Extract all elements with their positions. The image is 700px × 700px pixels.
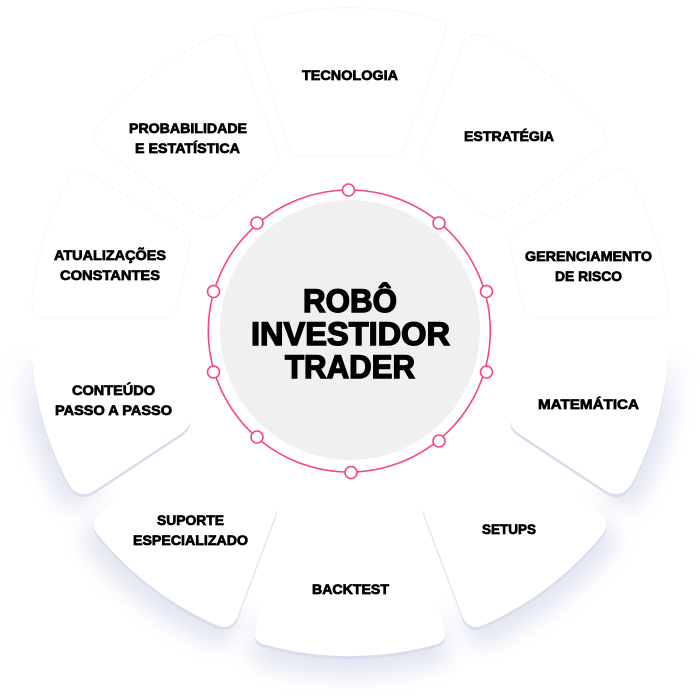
label: Atualizações constantes: CONSTANTES — [60, 268, 160, 284]
label: Suporte especializado: ESPECIALIZADO — [133, 533, 248, 549]
center title: INVESTIDOR — [251, 316, 450, 352]
label: Conteúdo passo a passo: CONTEÚDO — [72, 381, 155, 399]
label: Suporte especializado: SUPORTE — [157, 513, 224, 529]
ring nodes — [208, 184, 492, 478]
label: Gerenciamento de risco: GERENCIAMENTO — [525, 249, 652, 265]
panel: Tecnologia — [254, 8, 446, 156]
label: Atualizações constantes: ATUALIZAÇÕES — [54, 246, 166, 264]
label: Estratégia: ESTRATÉGIA — [464, 128, 554, 145]
label: Tecnologia: TECNOLOGIA — [302, 68, 398, 84]
label: Backtest: BACKTEST — [312, 582, 389, 598]
label: Gerenciamento de risco: DE RISCO — [555, 269, 622, 285]
panel: Estratégia — [422, 35, 606, 217]
center title — [251, 283, 450, 385]
panel: Backtest — [255, 508, 445, 659]
panel: Matemática — [510, 346, 668, 497]
center title: TRADER — [285, 349, 415, 385]
label: Gerenciamento de risco — [525, 249, 652, 285]
panel: Gerenciamento de risco — [510, 170, 668, 318]
label: Setups: SETUPS — [482, 522, 536, 538]
label: Conteúdo passo a passo — [55, 381, 172, 419]
label: Matemática: MATEMÁTICA — [538, 396, 639, 413]
panel: Conteúdo passo a passo — [32, 346, 190, 497]
label: Atualizações constantes — [54, 246, 166, 284]
soft shadow under lower petals — [19, 354, 681, 676]
panel: Atualizações constantes — [32, 170, 190, 318]
label: Suporte especializado — [133, 513, 248, 549]
label: Probabilidade e estatística — [129, 121, 247, 157]
center circle — [220, 200, 480, 460]
panel: Suporte especializado — [94, 445, 277, 630]
pink ring — [208, 190, 490, 472]
label: Probabilidade e estatística: PROBABILIDADE — [129, 121, 247, 137]
label: Conteúdo passo a passo: PASSO A PASSO — [55, 403, 172, 419]
center title: ROBÔ — [303, 283, 397, 319]
panel: Probabilidade e estatística — [94, 35, 278, 217]
panel: Setups — [423, 445, 606, 630]
label: Probabilidade e estatística: E ESTATÍSTICA — [135, 140, 240, 157]
